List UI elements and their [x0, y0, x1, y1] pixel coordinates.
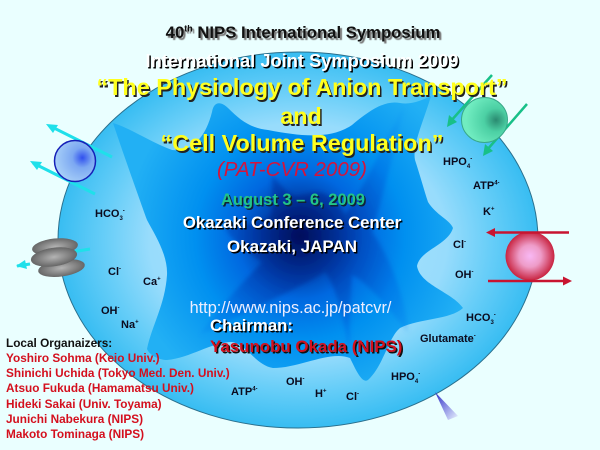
- main title: cell volume: “Cell Volume Regulation”: [161, 130, 443, 156]
- ion: Cl right: Cl-: [453, 239, 466, 251]
- organizers heading: Local Organaizers:: [6, 336, 112, 350]
- ion: HCO3 right: HCO3-: [466, 312, 496, 326]
- location: Okazaki, JAPAN: [227, 236, 357, 256]
- local organizers list: [6, 336, 230, 441]
- organizer 6: Makoto Tominaga (NIPS): [6, 427, 144, 441]
- inner dark star: [200, 105, 408, 362]
- organizer 4: Hideki Sakai (Univ. Toyama): [6, 397, 162, 411]
- ion: HPO4 right: HPO4-: [443, 156, 472, 170]
- main title: and: and: [280, 103, 322, 129]
- red pump with arrows: [486, 228, 572, 286]
- ion: OH bottom: OH-: [286, 376, 304, 388]
- organizer 3: Atsuo Fukuda (Hamamatsu Univ.): [6, 381, 194, 395]
- ion: ATP bottom: ATP4-: [231, 386, 258, 398]
- abbreviation: (PAT-CVR 2009): [217, 158, 367, 181]
- ion: Glutamate: Glutamate-: [420, 333, 476, 345]
- ion: H: H+: [315, 388, 326, 400]
- chairman name: Yasunobu Okada (NIPS): [210, 337, 402, 356]
- green transporter with arrows: [447, 75, 527, 156]
- venue: Okazaki Conference Center: [183, 212, 401, 232]
- title line: joint symposium: International Joint Symposium 2009: [146, 50, 458, 71]
- gray vesicle stack with arrow: [16, 236, 90, 280]
- website url: http://www.nips.ac.jp/patcvr/: [190, 299, 391, 317]
- ion: Cl bottom: Cl-: [346, 391, 359, 403]
- ion: ATP right: ATP4-: [473, 180, 500, 192]
- ion: Cl left: Cl-: [108, 266, 121, 278]
- date: August 3 – 6, 2009: [221, 190, 365, 208]
- ion: Ca: Ca+: [143, 276, 161, 288]
- pale blue cone at cell edge: [435, 392, 458, 420]
- ion: HPO4 bottom: HPO4-: [391, 371, 420, 385]
- organizer 2: Shinichi Uchida (Tokyo Med. Den. Univ.): [6, 366, 230, 380]
- ion: HCO3 left: HCO3-: [95, 208, 125, 222]
- cell body: [58, 52, 538, 428]
- blue channel with arrows: [30, 124, 112, 194]
- organizer 5: Junichi Nabekura (NIPS): [6, 412, 143, 426]
- main title: “The Physiology of Anion Transport”: [96, 74, 508, 100]
- ion labels: [95, 156, 500, 403]
- title line: symposium number: 40th NIPS International Symposium: [166, 23, 440, 42]
- cell nucleus star: [113, 96, 463, 381]
- organizer 1: Yoshiro Sohma (Keio Univ.): [6, 351, 160, 365]
- ion: OH left: OH-: [101, 305, 120, 317]
- ion: OH right: OH-: [455, 269, 474, 281]
- chairman label: Chairman:: [210, 316, 293, 334]
- ion: Na: Na+: [121, 319, 139, 331]
- ion: K: K+: [483, 206, 494, 218]
